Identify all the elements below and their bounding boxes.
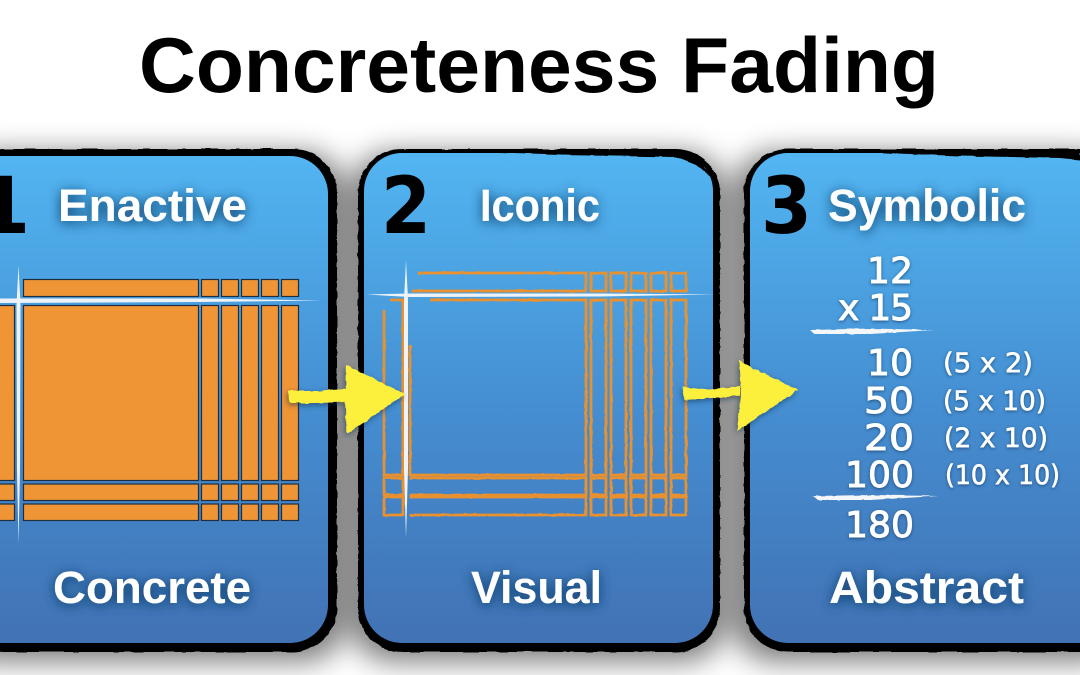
step number 2: 2	[381, 162, 431, 252]
multiplication working: 180	[845, 505, 914, 546]
partial product notes: (2 x 10)	[944, 423, 1048, 454]
chalk lines	[0, 265, 322, 544]
panel 2: iconic	[358, 149, 720, 652]
arrow: panel 2 to panel 3	[682, 361, 798, 431]
heading Enactive: Enactive	[58, 180, 247, 231]
area model outlines	[384, 273, 686, 515]
heading Iconic: Iconic	[480, 180, 600, 231]
panel 2 background card	[364, 153, 713, 643]
panel 3: symbolic	[744, 149, 1080, 652]
panel 1 border	[0, 149, 337, 652]
panel shadows	[0, 152, 1080, 662]
multiplication working: 20	[864, 418, 914, 459]
panel 3 border	[744, 149, 1080, 652]
panel 2 border	[358, 149, 720, 652]
step number 3: 3	[761, 162, 812, 252]
arrow: panel 1 to panel 2	[288, 365, 405, 434]
title: Concreteness Fading	[139, 21, 939, 109]
panel 3 heavy top stroke	[860, 149, 1080, 160]
partial product notes	[943, 348, 1060, 491]
panel 1: enactive	[0, 149, 337, 652]
area model blocks	[0, 280, 298, 520]
partial product notes: (5 x 10)	[943, 386, 1046, 417]
panel 2 heavy top stroke	[470, 150, 712, 178]
chalk lines	[366, 260, 716, 538]
panel 3 background card	[750, 153, 1080, 643]
label Visual: Visual	[471, 562, 602, 613]
label Concrete: Concrete	[53, 562, 251, 613]
multiplication working: x 15	[838, 288, 913, 329]
multiplication working: 50	[864, 381, 914, 422]
partial product notes: (5 x 2)	[943, 348, 1033, 379]
label Abstract: Abstract	[829, 562, 1024, 613]
partial product notes: (10 x 10)	[945, 460, 1060, 491]
panel 1 background card	[0, 156, 328, 643]
multiplication working: 12	[867, 251, 913, 292]
multiplication working: 100	[845, 455, 914, 496]
heading Symbolic: Symbolic	[828, 180, 1026, 231]
multiplication working	[838, 251, 914, 546]
chalk rules	[810, 328, 938, 500]
multiplication working: 10	[867, 343, 913, 384]
